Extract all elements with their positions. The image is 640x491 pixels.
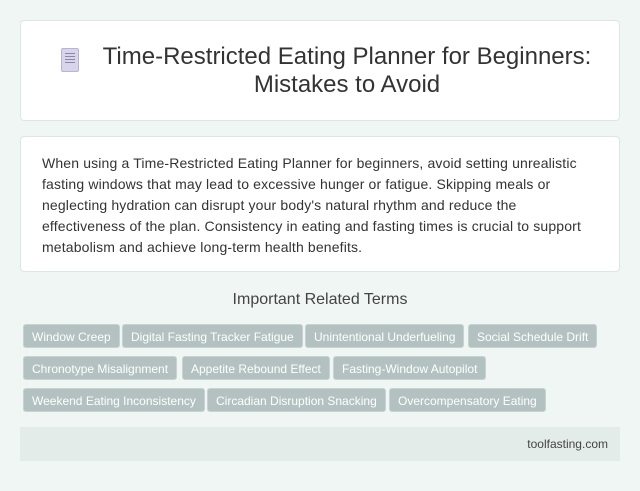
tags: Fasting-Window Autopilot: [342, 362, 477, 376]
description card: [20, 136, 620, 272]
tags: Appetite Rebound Effect: [191, 362, 321, 376]
tags: Overcompensatory Eating: [398, 394, 537, 408]
tags: Weekend Eating Inconsistency: [32, 394, 196, 408]
title: Time-Restricted Eating Planner for Beginners: Mistakes to Avoid: [103, 43, 591, 98]
description text: When using a Time-Restricted Eating Planner for beginners, avoid setting unrealistic fasting windows that may lead to excessive hunger or fatigue. Skipping meals or neglecting hydration can disrupt your body's natural rhythm and reduce the effectiveness of the plan. Consistency in eating and fasting times is crucial to support metabolism and achieve long-term health benefits.: [42, 155, 581, 255]
tags: Digital Fasting Tracker Fatigue: [131, 330, 294, 344]
tags: Window Creep: [32, 330, 111, 344]
tags: Chronotype Misalignment: [32, 362, 168, 376]
footer: [20, 427, 620, 461]
icon: document: [61, 48, 79, 72]
title card: [20, 20, 620, 121]
tags: Social Schedule Drift: [477, 330, 588, 344]
footer source: toolfasting.com: [527, 437, 608, 451]
tags: Circadian Disruption Snacking: [216, 394, 377, 408]
tags: Unintentional Underfueling: [314, 330, 455, 344]
heading: related terms: Important Related Terms: [233, 291, 407, 308]
